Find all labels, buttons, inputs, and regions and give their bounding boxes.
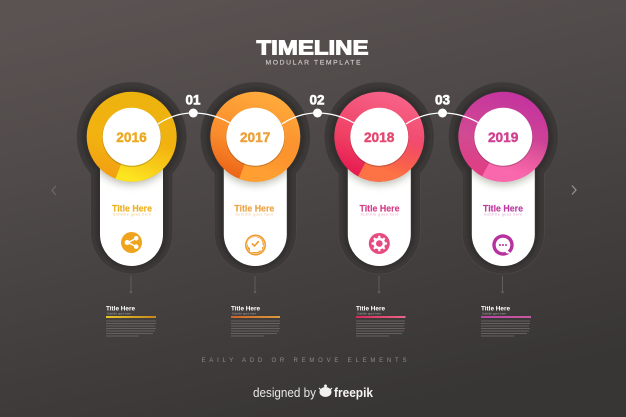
icon: freepik mascot bbox=[319, 384, 332, 397]
colour ring bbox=[87, 92, 177, 182]
stem 1 bbox=[130, 276, 132, 293]
text block 1: Title Here bbox=[106, 306, 136, 312]
column 4: 2019: 2019 bbox=[488, 129, 519, 145]
node 01 bbox=[185, 92, 201, 118]
column 2: 2017: Subtitle goes here bbox=[235, 213, 273, 217]
node 02: 02 bbox=[309, 92, 325, 108]
card title: Title Here bbox=[483, 204, 523, 214]
text block 1 bbox=[106, 306, 156, 336]
text block 3: Subtitle goes here bbox=[357, 312, 382, 316]
text block 2: Subtitle goes here bbox=[232, 312, 257, 316]
node 03 bbox=[435, 92, 450, 118]
year disc bbox=[350, 108, 409, 167]
right chevron bbox=[572, 186, 576, 194]
white pill bbox=[333, 93, 425, 266]
footer caption: EAILY ADD OR REMOVE ELEMENTS bbox=[202, 358, 406, 364]
colour ring bbox=[458, 92, 548, 182]
credit: designed by freepik bbox=[253, 384, 374, 400]
text block 2: Title Here bbox=[231, 306, 261, 312]
icon: chat bubble bbox=[492, 234, 514, 256]
subtitle: MODULAR TEMPLATE bbox=[266, 60, 361, 66]
stem 3 bbox=[378, 276, 380, 293]
dark halo bbox=[200, 82, 310, 274]
column 2: 2017 bbox=[200, 82, 310, 274]
title: TIMELINE bbox=[256, 38, 368, 60]
column 1: 2016: 2016 bbox=[116, 129, 147, 145]
node 02 bbox=[309, 92, 325, 118]
text block 4: Subtitle goes here bbox=[482, 312, 507, 316]
connector lines bbox=[158, 113, 479, 124]
text block 3: Title Here bbox=[356, 306, 386, 312]
text block 2 bbox=[231, 306, 280, 336]
dark halo bbox=[448, 82, 558, 274]
icon: head with check bbox=[245, 234, 266, 256]
colour ring bbox=[210, 92, 300, 182]
text block 1: Subtitle goes here bbox=[107, 312, 132, 316]
left chevron bbox=[52, 186, 56, 195]
card title: Title Here bbox=[112, 204, 152, 214]
text block 4: Title Here bbox=[481, 306, 511, 312]
node 01: 01 bbox=[185, 92, 201, 108]
text block 3 bbox=[356, 306, 406, 336]
card title: Title Here bbox=[360, 204, 400, 214]
stem 2 bbox=[254, 276, 256, 293]
year disc bbox=[102, 108, 161, 167]
column 3: 2018 bbox=[324, 82, 434, 274]
dark halo bbox=[324, 82, 434, 274]
white pill bbox=[209, 93, 301, 266]
column 4: 2019: Subtitle goes here bbox=[484, 213, 522, 217]
column 4: 2019 bbox=[448, 82, 558, 274]
year disc bbox=[226, 108, 285, 167]
column 2: 2017: 2017 bbox=[240, 129, 271, 145]
text block 4 bbox=[481, 306, 531, 336]
credit: designed by freepik: freepik bbox=[334, 385, 374, 400]
node 03: 03 bbox=[435, 92, 450, 108]
column 1: 2016 bbox=[77, 82, 187, 274]
colour ring bbox=[334, 92, 424, 182]
column 3: 2018: 2018 bbox=[364, 129, 395, 145]
stem 4 bbox=[501, 276, 504, 293]
card title: Title Here bbox=[234, 204, 274, 214]
white pill bbox=[86, 93, 178, 266]
column 3: 2018: Subtitle goes here bbox=[360, 213, 398, 217]
credit: designed by freepik: designed by bbox=[253, 386, 317, 400]
white pill bbox=[457, 93, 549, 266]
year disc bbox=[474, 108, 533, 167]
icon: gear bbox=[369, 233, 390, 254]
title bbox=[256, 38, 368, 66]
dark halo bbox=[77, 82, 187, 274]
icon: share bbox=[121, 232, 142, 253]
column 1: 2016: Subtitle goes here bbox=[113, 213, 151, 217]
